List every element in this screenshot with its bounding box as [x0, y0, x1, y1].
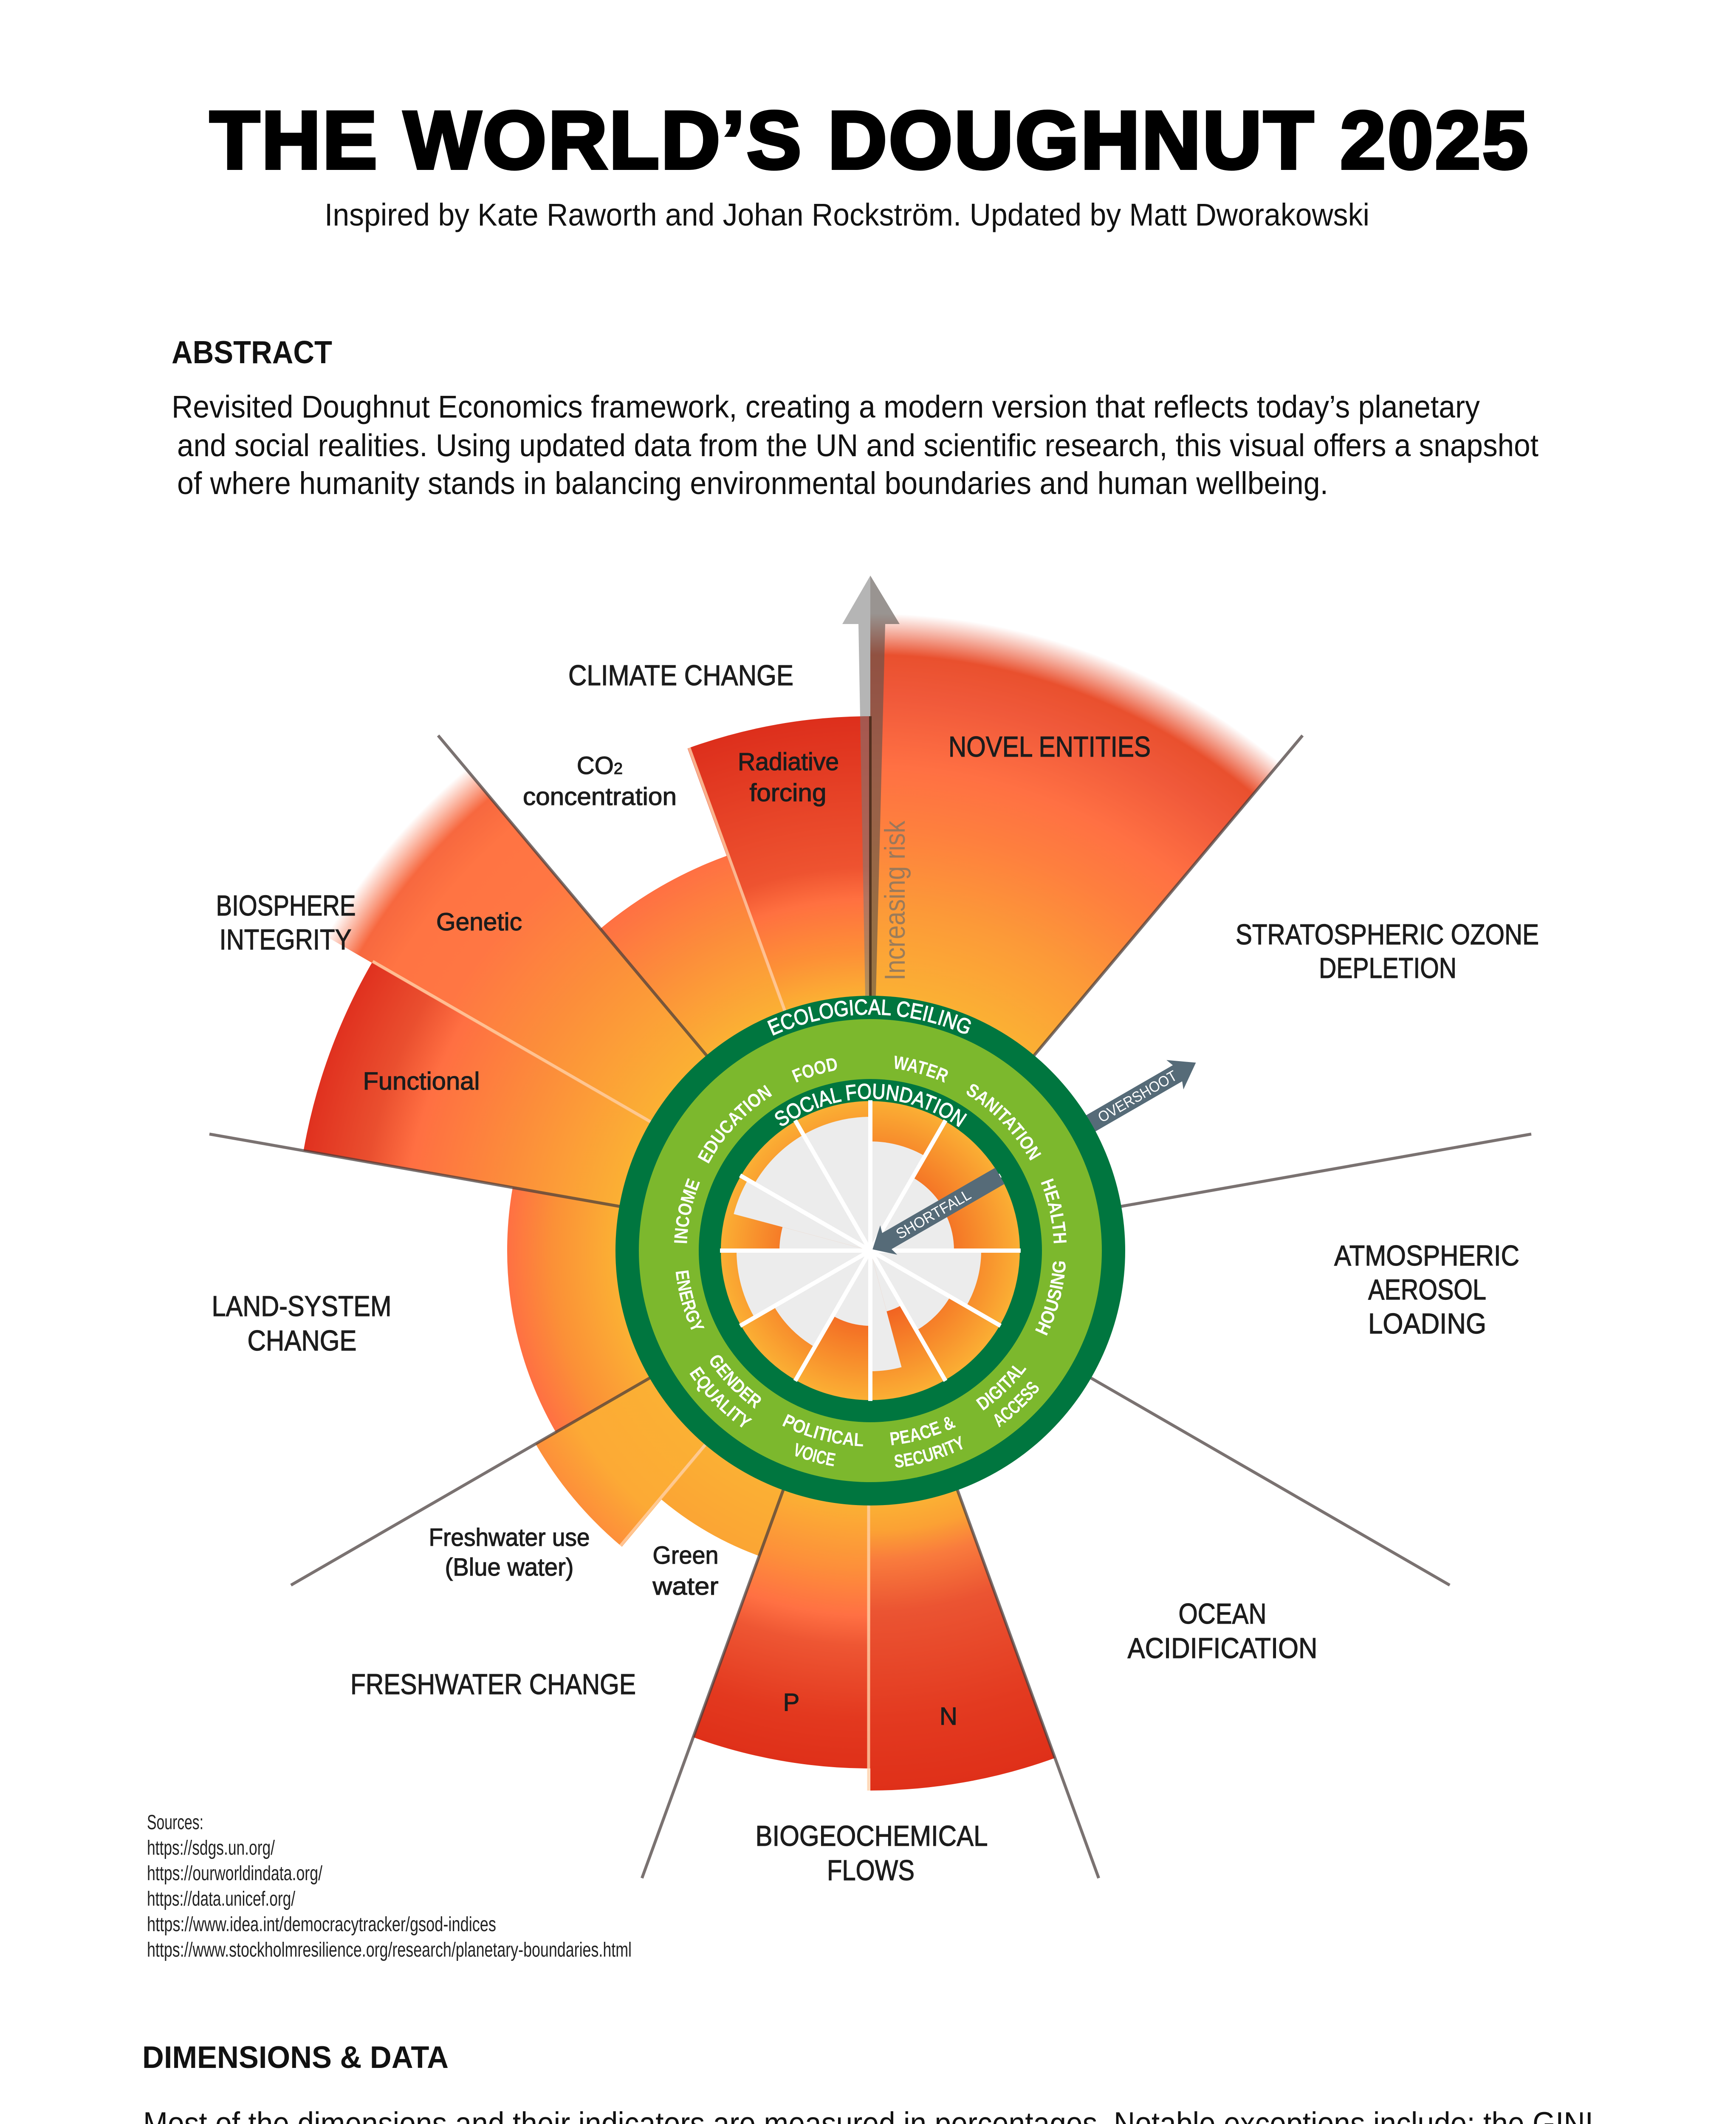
- text block: sources: [147, 1811, 632, 1961]
- wedge: novel entities: [870, 613, 1280, 1251]
- label: land-system change: [212, 1290, 392, 1357]
- ring: social foundation: [699, 1079, 1042, 1422]
- label: security: SECURITY: [892, 1432, 969, 1472]
- label: green water: Green: [652, 1542, 719, 1569]
- wedge: phosphorus: [693, 1251, 870, 1768]
- label: increasing risk: Increasing risk: [879, 820, 911, 980]
- text block: sources: https://ourworldindata.org/: [147, 1862, 322, 1885]
- text block: sources: https://www.idea.int/democracytracker/gsod-indices: [147, 1913, 496, 1936]
- label: CO2 concentration: concentration: [523, 783, 677, 811]
- label: voice: VOICE: [790, 1435, 841, 1475]
- text block: abstract: and social realities. Using updated data from the UN and scientific research, this visual offers a snapshot: [177, 428, 1538, 463]
- text block: sources: Sources:: [147, 1811, 203, 1834]
- chart: doughnut: [209, 576, 1531, 1878]
- label: access: ACCESS: [985, 1375, 1048, 1431]
- text block: abstract: [172, 389, 1538, 501]
- label: N: N: [940, 1703, 957, 1730]
- label: biogeochemical flows: [755, 1820, 988, 1887]
- label: water: WATER: [891, 1052, 952, 1087]
- label: atmospheric aerosol loading: ATMOSPHERIC: [1334, 1240, 1519, 1272]
- label: land-system change: LAND-SYSTEM: [212, 1290, 392, 1322]
- wedge: CO2 concentration: [600, 836, 980, 1251]
- label: biogeochemical flows: BIOGEOCHEMICAL: [755, 1820, 988, 1852]
- ring: dimensions band: [639, 1019, 1102, 1482]
- label: sanitation: SANITATION: [950, 1079, 1059, 1169]
- ring labels: [670, 938, 1084, 1475]
- boundary labels: [212, 659, 1539, 1887]
- label: green water: water: [652, 1573, 719, 1600]
- label: political: POLITICAL: [779, 1395, 872, 1467]
- label: stratospheric ozone depletion: STRATOSPHERIC OZONE: [1236, 918, 1539, 951]
- label: green water: [652, 1542, 719, 1600]
- label: stratospheric ozone depletion: DEPLETION: [1319, 952, 1457, 984]
- label: equality: EQUALITY: [685, 1356, 759, 1442]
- label: biosphere integrity: [216, 890, 356, 956]
- label: ocean acidification: [1127, 1598, 1318, 1664]
- label: digital: DIGITAL: [968, 1355, 1036, 1415]
- label: novel entities: NOVEL ENTITIES: [948, 731, 1151, 763]
- text block: abstract: of where humanity stands in balancing environmental boundaries and human wellbeing.: [177, 466, 1328, 501]
- wedge: nitrogen: [697, 1251, 1055, 1821]
- text block: sources: https://www.stockholmresilience.org/research/planetary-boundaries.html: [147, 1939, 632, 1961]
- ring: ecological ceiling: [615, 996, 1125, 1505]
- label: atmospheric aerosol loading: [1334, 1240, 1519, 1340]
- title: THE WORLD’S DOUGHNUT 2025: [210, 94, 1528, 186]
- label: P: P: [783, 1689, 799, 1716]
- label: education: EDUCATION: [694, 1069, 780, 1178]
- label: ocean acidification: ACIDIFICATION: [1127, 1632, 1318, 1664]
- label: genetic: Genetic: [436, 908, 522, 936]
- label: radiative forcing: Radiative: [738, 748, 839, 776]
- label: gender: GENDER: [704, 1344, 769, 1419]
- label: CO2 concentration: CO2: [577, 752, 623, 780]
- label: freshwater use blue water: Freshwater use: [429, 1524, 590, 1551]
- label: peace and: PEACE &: [887, 1411, 959, 1450]
- heading: abstract: ABSTRACT: [172, 334, 332, 370]
- label: climate change: CLIMATE CHANGE: [568, 659, 793, 692]
- text block: sources: https://sdgs.un.org/: [147, 1837, 275, 1859]
- label: freshwater use blue water: [429, 1524, 590, 1581]
- heading: dimensions and data: DIMENSIONS & DATA: [142, 2040, 449, 2075]
- text block: sources: https://data.unicef.org/: [147, 1888, 295, 1910]
- label: social foundation: SOCIAL FOUNDATION: [770, 1017, 975, 1214]
- chart: social shortfall wedges: [720, 1100, 1021, 1401]
- label: ocean acidification: OCEAN: [1178, 1598, 1267, 1630]
- label: biogeochemical flows: FLOWS: [827, 1854, 915, 1887]
- arrow: shortfall: [864, 1161, 1008, 1264]
- text block: abstract: Revisited Doughnut Economics framework, creating a modern version that reflects today’s planetary: [172, 389, 1480, 424]
- wedge: green water: [655, 1213, 870, 1556]
- wedge: blue water: [521, 1166, 870, 1547]
- label: radiative forcing: forcing: [749, 779, 827, 807]
- label: freshwater change: FRESHWATER CHANGE: [350, 1668, 636, 1700]
- arrow: overshoot: [1079, 1048, 1204, 1140]
- label: ecological ceiling: ECOLOGICAL CEILING: [764, 938, 982, 1113]
- label: radiative forcing: [738, 748, 839, 807]
- label: stratospheric ozone depletion: [1236, 918, 1539, 984]
- label: freshwater use blue water: (Blue water): [445, 1553, 573, 1581]
- label: functional: Functional: [363, 1068, 480, 1095]
- subtitle: Inspired by Kate Raworth and Johan Rockström. Updated by Matt Dworakowski: [325, 197, 1369, 232]
- label: income: INCOME: [670, 1175, 704, 1245]
- label: housing: HOUSING: [1018, 1253, 1084, 1339]
- label: atmospheric aerosol loading: LOADING: [1368, 1308, 1486, 1340]
- label: food: FOOD: [789, 1048, 844, 1092]
- label: health: HEALTH: [1027, 1175, 1081, 1251]
- arrow: increasing risk: [842, 576, 900, 996]
- label: biosphere integrity: BIOSPHERE: [216, 890, 356, 922]
- label: energy: ENERGY: [671, 1268, 709, 1336]
- ecological overshoot wedges: [304, 613, 1280, 1821]
- arrow: shortfall: SHORTFALL: [893, 1186, 974, 1243]
- wedge: genetic biosphere integrity: [326, 750, 978, 1251]
- wedge: radiative forcing: [688, 686, 1042, 1251]
- label: land-system change: CHANGE: [247, 1325, 357, 1357]
- arrow: overshoot: OVERSHOOT: [1095, 1068, 1180, 1126]
- label: CO2 concentration: [523, 752, 677, 811]
- wedge: land-system change: [439, 1048, 870, 1432]
- label: atmospheric aerosol loading: AEROSOL: [1368, 1274, 1486, 1306]
- label: biosphere integrity: INTEGRITY: [219, 924, 352, 956]
- wedge: functional biosphere integrity: [304, 957, 904, 1251]
